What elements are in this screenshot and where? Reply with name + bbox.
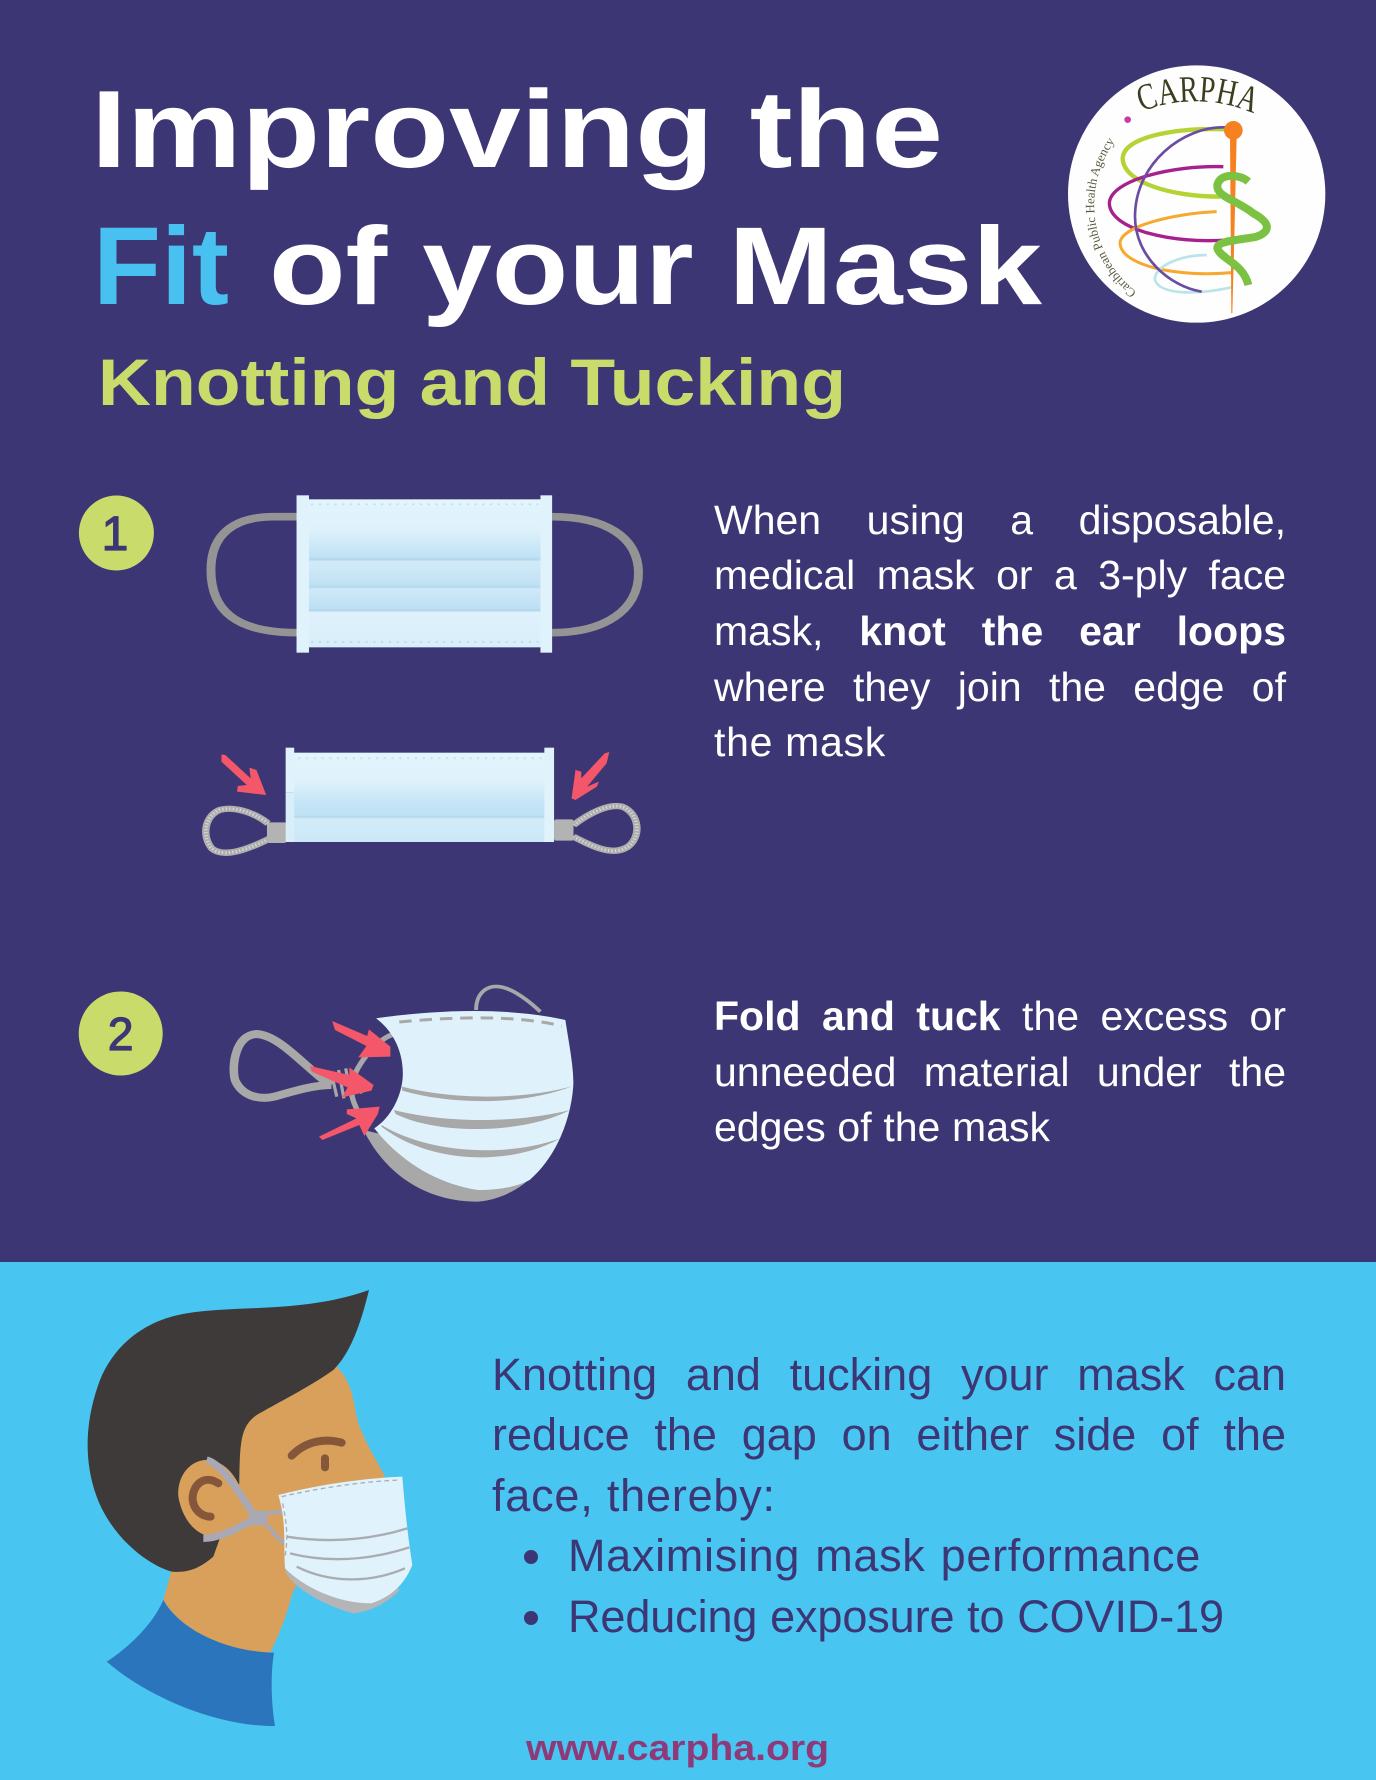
website link: www.carpha.org <box>525 1727 829 1768</box>
list: benefits: Maximising mask performance <box>568 1530 1201 1581</box>
text: step 2 instruction <box>714 993 1286 1150</box>
text: step 1 instruction: where they join the edge of <box>714 664 1286 710</box>
logo: CARPHA: CARPHA <box>1138 77 1254 114</box>
logo: CARPHA: Caribbean Public Health Agency <box>1086 138 1135 297</box>
panel: step 1 <box>78 495 643 856</box>
panel: header <box>91 65 1326 419</box>
subtitle: Knotting and Tucking <box>98 345 846 419</box>
mask with open ear loops <box>211 495 638 653</box>
illustration: masks with ear loops <box>202 495 643 856</box>
bullet 2 <box>524 1611 538 1625</box>
panel: benefits <box>0 1262 1376 1780</box>
title: Improving the <box>91 68 943 191</box>
step 1 badge: 1 <box>102 508 128 561</box>
step 2 badge: 2 <box>108 1008 133 1060</box>
text: step 2 instruction: unneeded material under the <box>714 1049 1286 1095</box>
arrow: top <box>332 1021 390 1057</box>
arrow: middle <box>310 1066 374 1097</box>
list: benefits <box>524 1530 1224 1642</box>
text: step 1 instruction <box>714 497 1286 765</box>
text: benefits intro: reduce the gap on either side of the <box>492 1409 1286 1460</box>
text: benefits intro: face, thereby: <box>492 1470 776 1521</box>
text: benefits intro: Knotting and tucking your mask can <box>492 1349 1286 1400</box>
illustration: man wearing mask <box>88 1290 412 1726</box>
step 1 badge <box>78 496 154 570</box>
text: step 2 instruction: edges of the mask <box>714 1104 1050 1150</box>
text: step 1 instruction: mask, knot the ear loops <box>714 608 1286 654</box>
text: step 1 instruction: the mask <box>714 719 886 765</box>
title <box>91 68 1043 328</box>
illustration: folded and tucked mask <box>230 984 574 1202</box>
text: step 2 instruction: Fold and tuck the excess or <box>714 993 1286 1039</box>
text: step 1 instruction: When using a disposable, <box>714 497 1286 543</box>
bullet 1 <box>524 1550 538 1564</box>
panel: step 2 <box>78 984 574 1202</box>
title: Fit <box>93 205 229 328</box>
title: of your Mask <box>269 205 1043 328</box>
list: benefits: Reducing exposure to COVID-19 <box>568 1591 1224 1642</box>
arrow: left knot <box>221 754 266 795</box>
text: benefits intro <box>492 1349 1286 1521</box>
logo: CARPHA <box>1068 65 1326 323</box>
mask with knotted ear loops <box>206 748 637 853</box>
step 2 badge <box>78 992 163 1076</box>
arrow: bottom <box>319 1107 380 1140</box>
arrow: right knot <box>572 752 609 800</box>
text: step 1 instruction: medical mask or a 3-ply face <box>714 552 1286 598</box>
